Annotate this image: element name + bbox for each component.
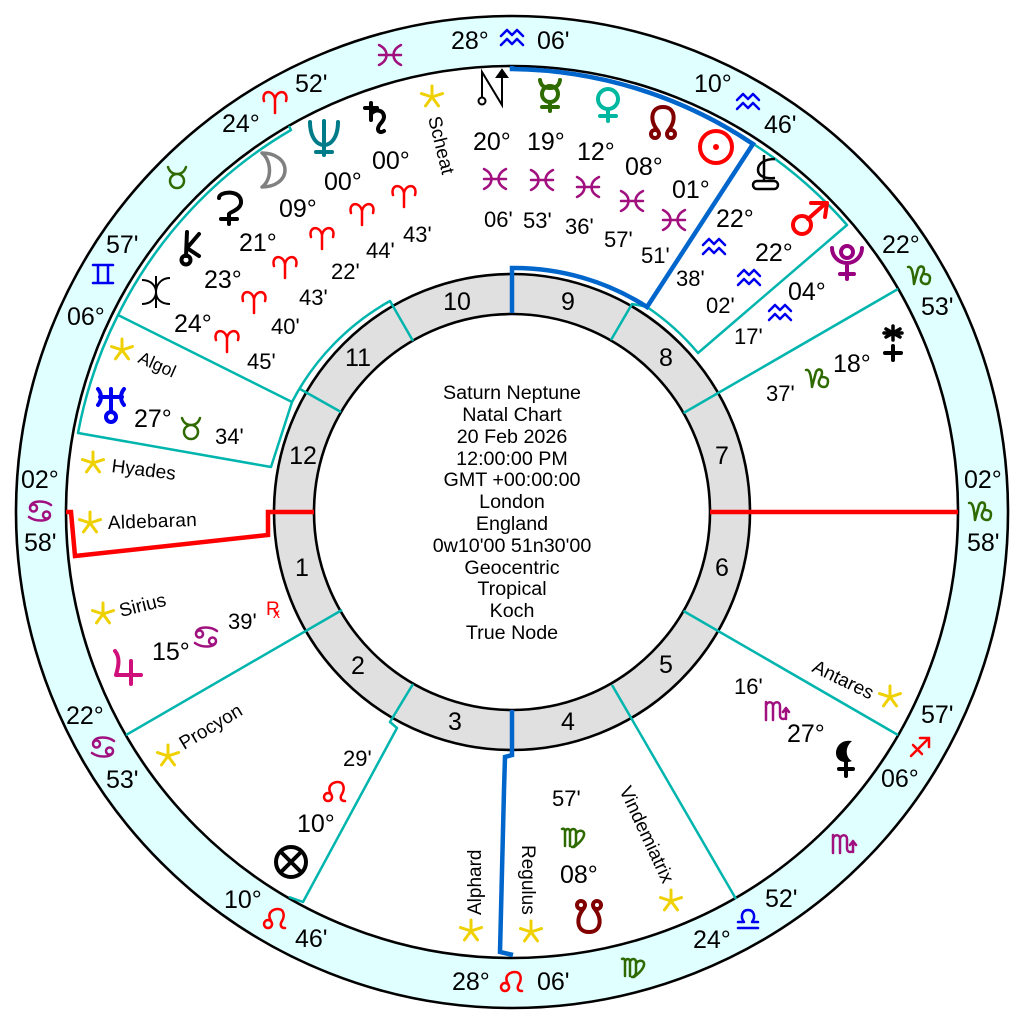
cusp 4 label: 28 Leo 06: 28°: [452, 968, 490, 996]
chart details text: Koch: [490, 600, 534, 622]
chart details text: 12:00:00 PM: [456, 448, 568, 470]
point: Black Moon 27 Scorpio 16: [734, 674, 853, 776]
cusp 8 label: 22 Capricorn 53: 22°: [882, 231, 920, 259]
cusp 6 label: 06 Sagittarius 57: 57': [921, 701, 954, 729]
house numbers: 2: [351, 652, 365, 680]
panel: planet area: [66, 66, 958, 958]
house numbers: 3: [448, 708, 462, 736]
point: South node 08 Virgo 57: 08°: [560, 861, 598, 889]
cusp 7 label: 02 Capricorn 58: [964, 466, 1002, 557]
planets and points: [98, 70, 902, 932]
star: Scheat: [422, 86, 458, 177]
house numbers: 5: [659, 651, 673, 679]
chart details text: GMT +00:00:00: [444, 469, 581, 491]
house numbers: 4: [561, 708, 575, 736]
point: Black Moon 27 Scorpio 16: 16': [734, 674, 763, 699]
planet: Moon 09 Aries 22: [262, 153, 360, 284]
star: Regulus: [517, 845, 542, 941]
star: Hyades: Hyades: [110, 456, 177, 485]
planet: Uranus 27 Taurus 34: 34': [215, 424, 244, 449]
point: asteroid 18 Capricorn 37: 18°: [833, 350, 871, 378]
point: Ceres 21 Aries 43: [219, 193, 328, 310]
planet: Jupiter 15 Cancer 39 retrograde: x: [273, 605, 280, 621]
cusp 7 label: 02 Capricorn 58: 58': [967, 529, 1000, 557]
cusp 5 label: 24 Libra 52: 52': [765, 885, 798, 913]
star: Hyades: [82, 452, 177, 485]
point: Lilith 24 Aries 45: [142, 276, 276, 374]
planet: Neptune 00 Aries 44: [310, 121, 395, 263]
cusp 8 label: 22 Capricorn 53: 53': [921, 293, 954, 321]
cusp 8 label: 22 Capricorn 53: [882, 231, 954, 321]
chart details text: Saturn Neptune: [443, 382, 581, 404]
cusp 11 label: 24 Aries 52: 24°: [222, 110, 260, 138]
point: Chiron 23 Aries 40: 40': [271, 314, 300, 339]
star: Algol: [112, 339, 179, 381]
house numbers: 10: [443, 288, 471, 316]
cusp 9 label: 10 Aquarius 46: 10°: [694, 70, 732, 98]
point: Black Moon 27 Scorpio 16: 27°: [787, 720, 825, 748]
cusp 3 label: 10 Leo 46: 10°: [224, 886, 262, 914]
point: Lilith 24 Aries 45: 24°: [174, 310, 212, 338]
point: South node 08 Virgo 57: [552, 786, 601, 932]
star: Sirius: [92, 590, 168, 623]
planet: Mercury 19 Pisces 53: 19°: [527, 128, 565, 156]
point: Vesta 22 Aquarius 38: 38': [676, 266, 705, 291]
star: Procyon: Procyon: [176, 700, 246, 754]
planet: Venus 12 Pisces 36: 12°: [577, 138, 615, 166]
cusp 1 label: 02 Cancer 58: 02°: [21, 466, 59, 494]
intercepted sign: Taurus: [168, 167, 186, 188]
cusp 9 label: 10 Aquarius 46: [694, 70, 797, 139]
point: Lilith 24 Aries 45: 45': [247, 349, 276, 374]
point: Ceres 21 Aries 43: 43': [299, 285, 328, 310]
chart details text: Geocentric: [464, 557, 560, 579]
star: Algol: Algol: [135, 347, 179, 381]
panel: centre disc: [314, 314, 710, 710]
point: Vesta 22 Aquarius 38: [676, 155, 778, 291]
point: Part of Fortune 10 Leo 29: [276, 746, 372, 877]
cusp 3 label: 10 Leo 46: 46': [295, 925, 328, 953]
midheaven axis with blue highlight: [500, 66, 753, 955]
planet: Jupiter 15 Cancer 39 retrograde: [115, 599, 280, 684]
star: Vindemiatrix: Vindemiatrix: [614, 783, 678, 887]
cusp 3 label: 10 Leo 46: [224, 886, 328, 953]
point: asteroid 18 Capricorn 37: 37': [766, 381, 795, 406]
planet: Uranus 27 Taurus 34: [98, 389, 244, 449]
star: Aldebaran: Aldebaran: [107, 510, 197, 534]
planet: Mars 22 Aquarius 02: 02': [706, 293, 735, 318]
star: Sirius: Sirius: [117, 590, 168, 622]
house numbers: [289, 288, 729, 736]
point: asteroid 18 Capricorn 37: [766, 326, 902, 406]
star: Regulus: Regulus: [517, 845, 538, 915]
point: Part of Fortune 10 Leo 29: 10°: [297, 810, 335, 838]
planet: Mars 22 Aquarius 02: [706, 203, 827, 318]
cusp 7 label: 02 Capricorn 58: 02°: [964, 466, 1002, 494]
chart details text: Natal Chart: [462, 404, 562, 426]
cusp 6 label: 06 Sagittarius 57: [881, 701, 954, 793]
point: Part of Fortune 10 Leo 29: 29': [343, 746, 372, 771]
point: Chiron 23 Aries 40: 23°: [204, 266, 242, 294]
cusp 12 label: 06 Gemini 57: [67, 231, 139, 331]
point: South node 08 Virgo 57: 57': [552, 786, 581, 811]
cusp 4 label: 28 Leo 06: 06': [537, 968, 570, 996]
planet: Pluto 04 Aquarius 17: 04°: [788, 278, 826, 306]
cusp 6 label: 06 Sagittarius 57: 06°: [881, 765, 919, 793]
house numbers: 12: [289, 442, 317, 470]
planet: Moon 09 Aries 22: 09°: [279, 195, 317, 223]
planet: Venus 12 Pisces 36: 36': [565, 214, 594, 239]
panel: house number ring: [274, 274, 750, 750]
house numbers: 9: [561, 288, 575, 316]
planet: Moon 09 Aries 22: 22': [331, 259, 360, 284]
cusp 5 label: 24 Libra 52: 24°: [693, 926, 731, 954]
planet: North node 20 Pisces 06: 20°: [473, 128, 511, 156]
cusp 5 label: 24 Libra 52: [693, 885, 798, 954]
planet: Uranus 27 Taurus 34: 27°: [134, 405, 172, 433]
cusp 12 label: 06 Gemini 57: 57': [106, 231, 139, 259]
star: Alphard: [460, 850, 486, 940]
cusp 10 label: 28 Aquarius 06: 28°: [451, 27, 489, 55]
chart details text: 20 Feb 2026: [457, 426, 567, 448]
point: Vesta 22 Aquarius 38: 22°: [716, 205, 754, 233]
point: Chiron 23 Aries 40: [182, 232, 300, 339]
chart details text: Tropical: [477, 578, 547, 600]
cusp 1 label: 02 Cancer 58: 58': [24, 529, 57, 557]
planet: Jupiter 15 Cancer 39 retrograde: 15°: [152, 638, 190, 666]
cusp 2 label: 22 Cancer 53: [66, 702, 139, 794]
chart details text: 0w10'00 51n30'00: [433, 535, 591, 557]
cusp 2 label: 22 Cancer 53: 22°: [66, 702, 104, 730]
intercepted sign: Virgo: [622, 959, 644, 977]
planet: North node 20 Pisces 06: 06': [484, 207, 513, 232]
planet: Venus 12 Pisces 36: [565, 89, 618, 239]
chart details text: London: [479, 491, 545, 513]
cusp 1 label: 02 Cancer 58: [21, 466, 59, 557]
star: Procyon: [158, 700, 246, 765]
intercepted sign: Scorpio: [833, 835, 856, 853]
planet: Saturn 00 Aries 43: [365, 103, 432, 247]
planet: Neptune 00 Aries 44: 44': [366, 238, 395, 263]
cusp 2 label: 22 Cancer 53: 53': [106, 766, 139, 794]
planet: Saturn 00 Aries 43: 00°: [372, 147, 410, 175]
cusp 9 label: 10 Aquarius 46: 46': [764, 111, 797, 139]
cusp 10 label: 28 Aquarius 06: [451, 27, 570, 55]
chart details text: [433, 382, 591, 644]
cusp 10 label: 28 Aquarius 06: 06': [537, 27, 570, 55]
chart details text: England: [476, 513, 548, 535]
fixed stars: [80, 86, 900, 941]
planet: Mercury 19 Pisces 53: [523, 80, 565, 233]
star: Alphard: Alphard: [465, 850, 486, 915]
planet: North node 20 Pisces 06: [473, 70, 513, 232]
planet: Sun 01 Pisces 51: 01°: [672, 176, 710, 204]
planet: Sun 01 Pisces 51: 51': [641, 243, 670, 268]
star: Scheat: Scheat: [423, 114, 458, 177]
cusp 11 label: 24 Aries 52: 52': [295, 70, 328, 98]
planet: Jupiter 15 Cancer 39 retrograde: 39': [228, 609, 257, 634]
planet: Mercury 19 Pisces 53: 53': [523, 208, 552, 233]
point: True node 08 Pisces 57: 08°: [625, 153, 663, 181]
point: True node 08 Pisces 57: 57': [604, 227, 633, 252]
planet: Neptune 00 Aries 44: 00°: [324, 168, 362, 196]
house numbers: 8: [659, 344, 673, 372]
planet: Mars 22 Aquarius 02: 22°: [755, 239, 793, 267]
cusp 4 label: 28 Leo 06: [452, 968, 570, 996]
cusp 11 label: 24 Aries 52: [222, 70, 328, 138]
house numbers: 7: [715, 442, 729, 470]
cusp 12 label: 06 Gemini 57: 06°: [67, 303, 105, 331]
point: Ceres 21 Aries 43: 21°: [239, 229, 277, 257]
house numbers: 11: [345, 344, 371, 372]
planet: Jupiter 15 Cancer 39 retrograde: R: [266, 599, 280, 620]
house numbers: 6: [715, 554, 729, 582]
house cusp lines: [78, 126, 898, 902]
chart details text: True Node: [466, 622, 558, 644]
intercepted sign: Pisces: [379, 45, 401, 65]
point: True node 08 Pisces 57: [604, 107, 675, 252]
planet: Pluto 04 Aquarius 17: 17': [734, 324, 763, 349]
planet: Sun 01 Pisces 51: [641, 131, 732, 268]
ascendant axis with red highlight: [66, 512, 958, 556]
planet: Pluto 04 Aquarius 17: [734, 246, 862, 349]
house numbers: 1: [295, 554, 309, 582]
planet: Saturn 00 Aries 43: 43': [403, 222, 432, 247]
star: Antares: Antares: [809, 657, 877, 704]
